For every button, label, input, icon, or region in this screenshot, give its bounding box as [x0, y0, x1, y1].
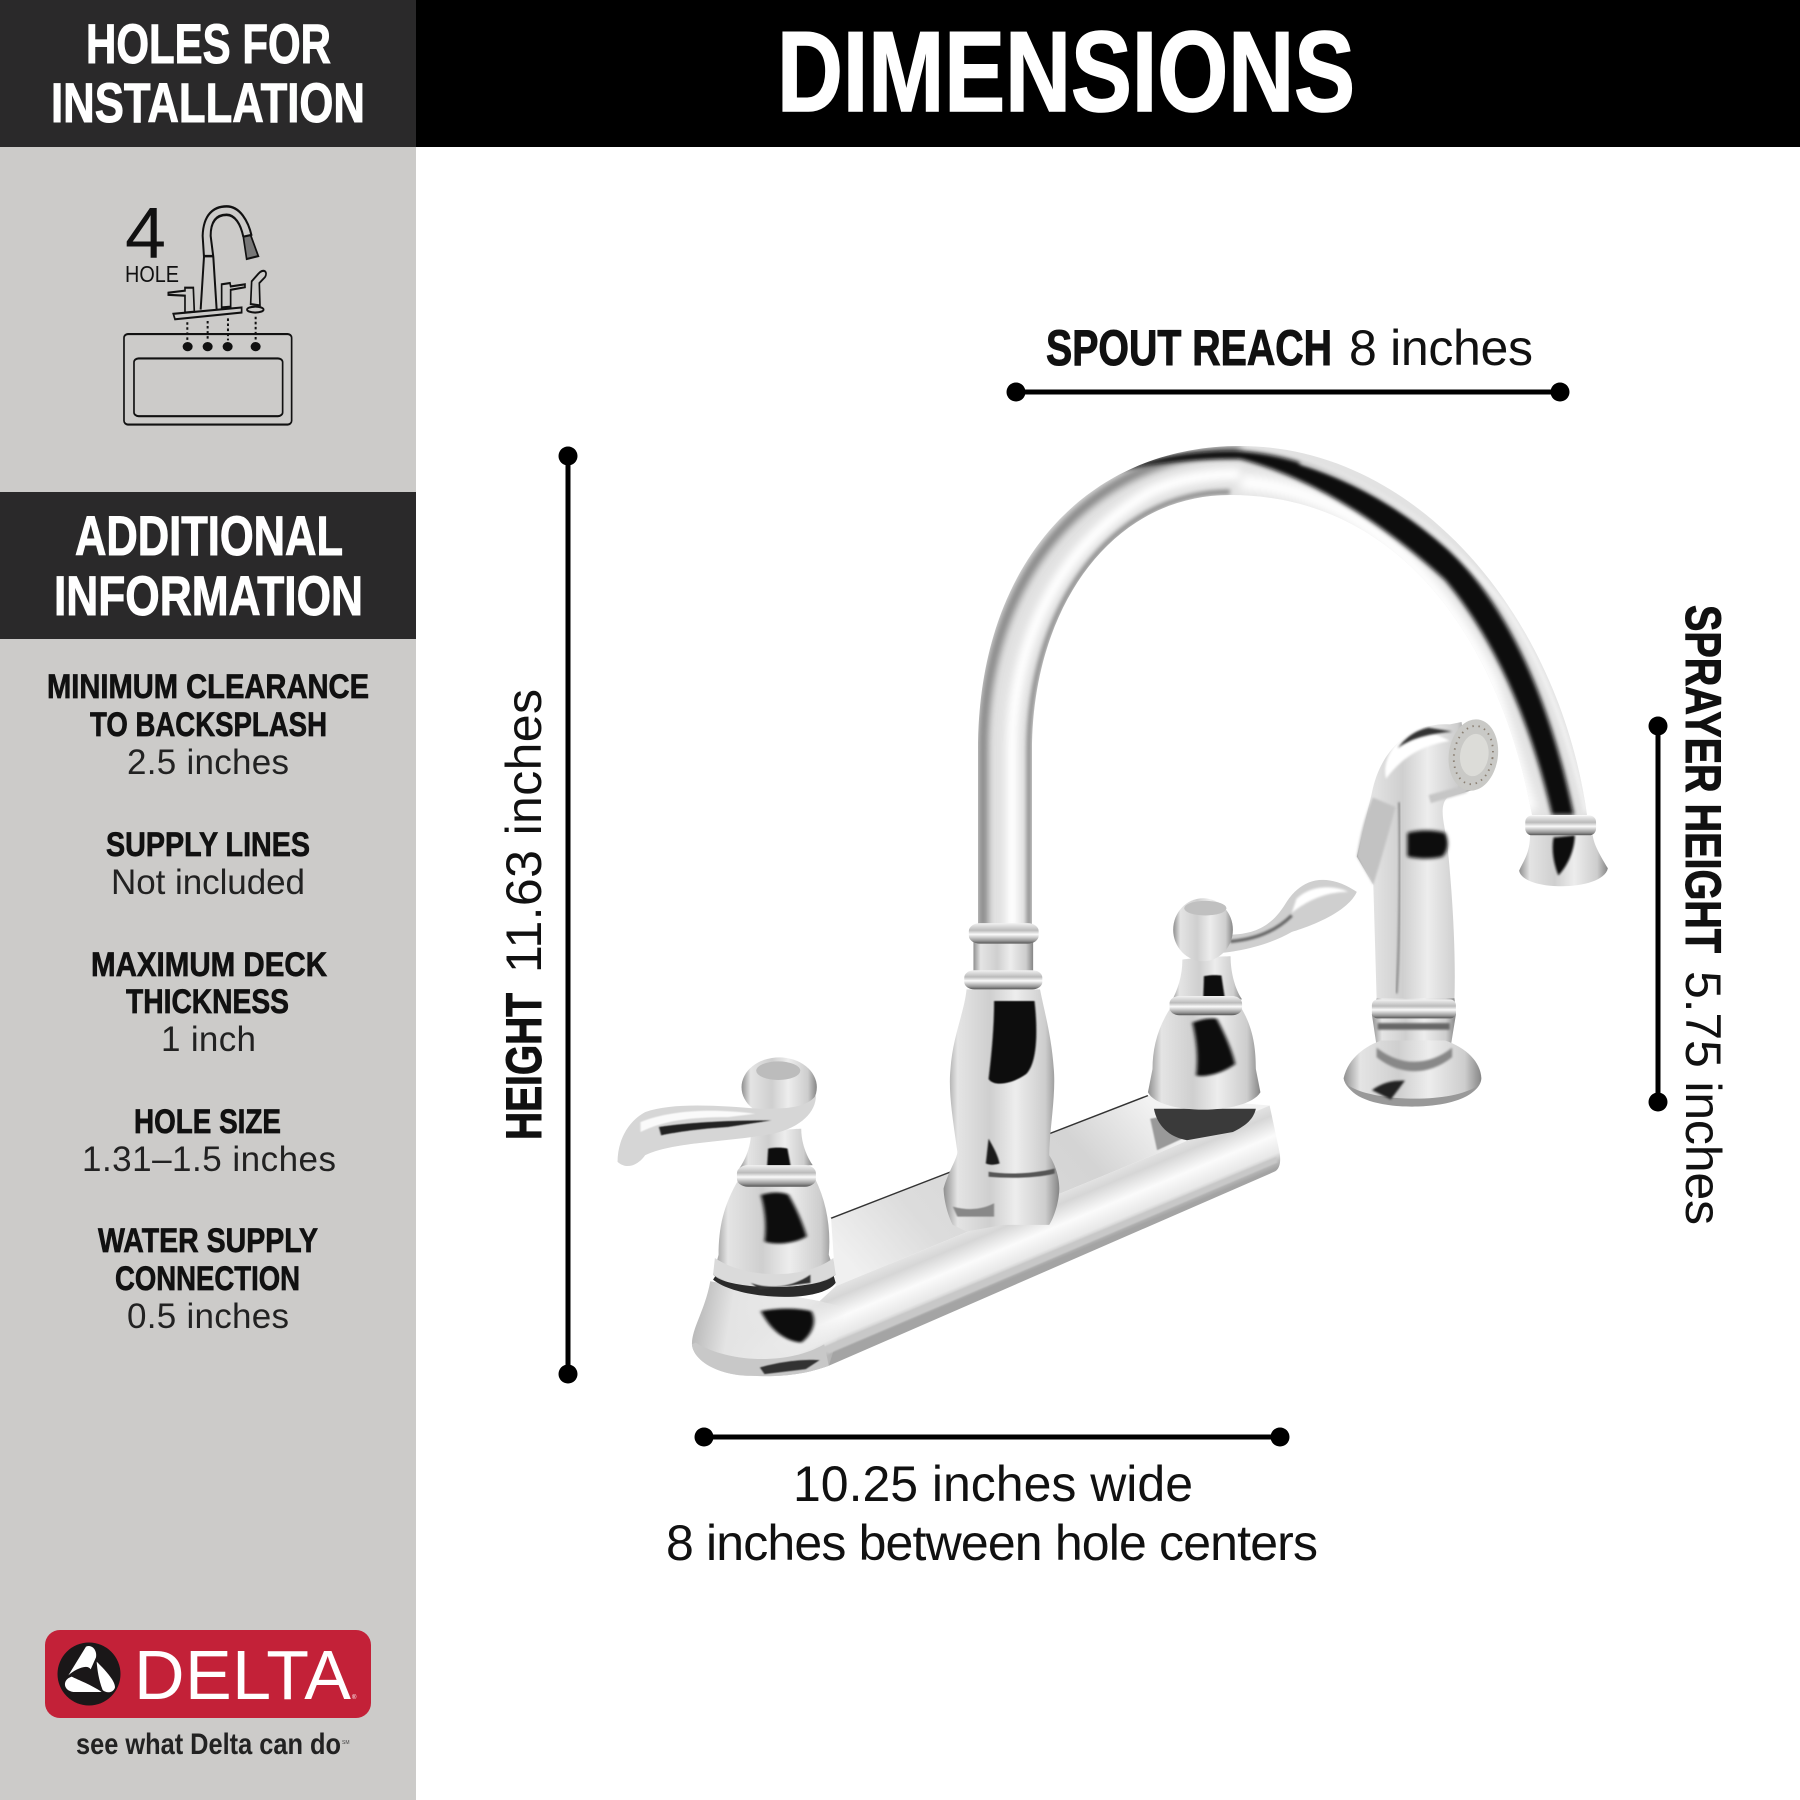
icon: four hole sink and faucet [124, 194, 292, 425]
text block: maximum deck thickness [91, 946, 327, 1059]
spout tip collar [1519, 815, 1608, 886]
arrow: sprayer height dimension line [1648, 716, 1668, 1112]
arrow: height dimension line [558, 446, 578, 1384]
text block: water supply connection [98, 1222, 318, 1336]
right handle lever [1197, 880, 1357, 954]
text block: hole size: 1.31–1.5 inches [82, 1140, 336, 1179]
center column [944, 923, 1059, 1231]
faucet photograph illustration [618, 446, 1608, 1376]
heading: additional information [0, 492, 416, 639]
heading: holes for installation: INSTALLATION [51, 71, 365, 134]
text block: water supply connection: 0.5 inches [127, 1297, 289, 1336]
arrow: width dimension line [694, 1428, 1290, 1446]
heading: dimensions: DIMENSIONS [777, 9, 1355, 136]
heading: holes for installation [0, 0, 416, 147]
text block: supply lines: SUPPLY LINES [106, 826, 310, 864]
sprayer [1344, 716, 1503, 1107]
text block: minimum clearance: 2.5 inches [127, 743, 289, 782]
tagline: see what Delta can do [76, 1728, 341, 1761]
text block: supply lines: Not included [111, 863, 305, 902]
label: sprayer height: SPRAYER HEIGHT [1675, 605, 1731, 953]
text block: maximum deck thickness: THICKNESS [126, 983, 289, 1021]
text block: maximum deck thickness: 1 inch [161, 1020, 256, 1059]
label: sprayer height: 5.75 inches [1675, 971, 1731, 1225]
text block: maximum deck thickness: MAXIMUM DECK [91, 946, 327, 984]
heading: additional information: ADDITIONAL [75, 504, 343, 567]
left handle [618, 1057, 836, 1290]
text block: hole size [82, 1103, 336, 1179]
spout [978, 446, 1587, 930]
tagline: SM [342, 1740, 350, 1746]
label: height: HEIGHT [496, 993, 552, 1140]
right handle [1148, 898, 1260, 1140]
heading: holes for installation: HOLES FOR [86, 12, 331, 75]
label: width: 10.25 inches wide [793, 1456, 1193, 1512]
panel: sidebar [0, 147, 416, 1800]
text block: minimum clearance [47, 668, 369, 782]
logo: delta: ® [352, 1694, 357, 1701]
logo: delta: DELTA [134, 1636, 351, 1714]
label: height: 11.63 inches [496, 689, 552, 973]
label: width [666, 1456, 1318, 1571]
text block: hole size: HOLE SIZE [134, 1103, 281, 1141]
text block: water supply connection: CONNECTION [115, 1260, 300, 1298]
logo: delta [45, 1630, 371, 1718]
label: height [496, 689, 552, 1140]
icon: four hole sink and faucet: HOLE [125, 261, 179, 287]
text block: minimum clearance: TO BACKSPLASH [90, 706, 327, 744]
label: width: 8 inches between hole centers [666, 1515, 1318, 1571]
icon: four hole sink and faucet: 4 [125, 194, 166, 274]
heading: additional information: INFORMATION [54, 564, 363, 627]
arrow: spout reach dimension line [1006, 382, 1570, 402]
text block: supply lines [106, 826, 310, 902]
label: spout reach: 8 inches [1349, 320, 1533, 376]
label: spout reach: SPOUT REACH [1046, 320, 1332, 376]
header bar: dimensions [416, 0, 1800, 147]
text block: minimum clearance: MINIMUM CLEARANCE [47, 668, 369, 706]
base plate [692, 1096, 1280, 1376]
text block: water supply connection: WATER SUPPLY [98, 1222, 318, 1260]
